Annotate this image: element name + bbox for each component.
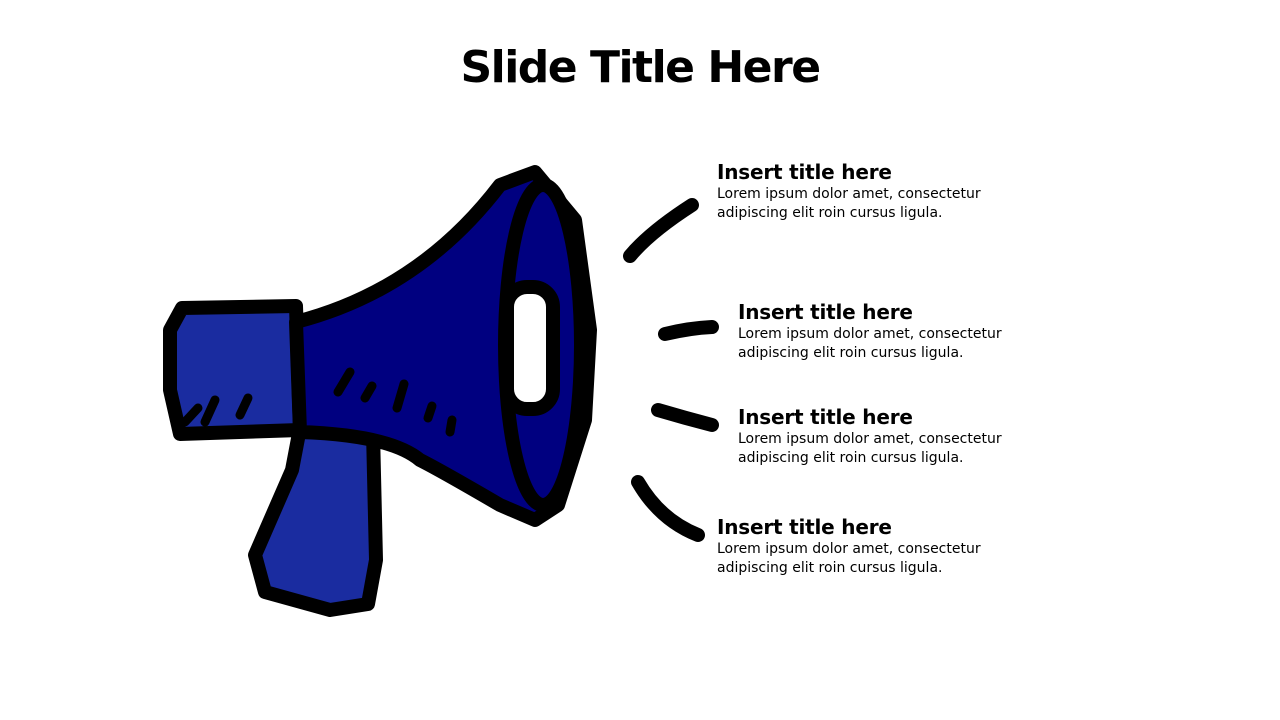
back box [170,306,300,434]
item 1: Insert title here [717,160,892,184]
item 4 [717,515,981,576]
grip marks [185,372,452,432]
handle [255,428,376,610]
item 4: Insert title here [717,515,892,539]
item 2: Insert title here [738,300,913,324]
item 1 [717,160,981,221]
item 1: Lorem ipsum dolor amet, consectetur [717,186,981,202]
item 3: adipiscing elit roin cursus ligula. [738,450,963,466]
item 2: adipiscing elit roin cursus ligula. [738,345,963,361]
item 3: Lorem ipsum dolor amet, consectetur [738,431,1002,447]
item 1: adipiscing elit roin cursus ligula. [717,205,942,221]
mouth [505,185,581,505]
cone [296,172,590,520]
item 3 [738,405,1002,466]
item 3: Insert title here [738,405,913,429]
item 4: adipiscing elit roin cursus ligula. [717,560,942,576]
title: Slide Title Here [460,42,820,93]
item 2 [738,300,1002,361]
item 4: Lorem ipsum dolor amet, consectetur [717,541,981,557]
sound lines [630,205,712,535]
item 2: Lorem ipsum dolor amet, consectetur [738,326,1002,342]
